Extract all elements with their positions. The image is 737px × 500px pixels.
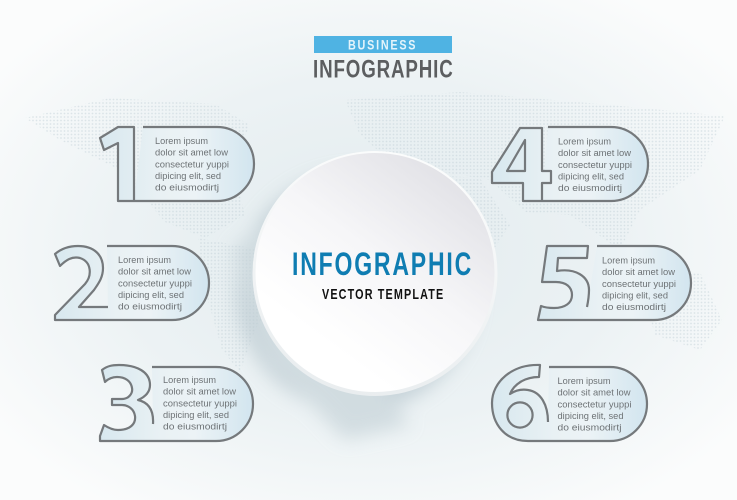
- panel 4 text: dipicing elit, sed: [558, 172, 624, 182]
- panel 6 text: dipicing elit, sed: [558, 411, 624, 422]
- title banner: [314, 36, 452, 53]
- panel 2 text: consectetur yuppi: [118, 278, 192, 289]
- title block: [313, 36, 454, 83]
- title: infographic: INFOGRAPHIC: [313, 55, 454, 83]
- panel 4 text: consectetur yuppi: [558, 160, 632, 171]
- panel 6: [492, 365, 647, 441]
- panel 6 text: [558, 376, 632, 434]
- central subheading: VECTOR TEMPLATE: [322, 285, 444, 302]
- panel 1: [100, 127, 254, 201]
- panel 3: [100, 365, 253, 441]
- panel 1 text: consectetur yuppi: [155, 159, 229, 170]
- numeral 6 inner ring: [507, 402, 533, 428]
- panel 4 text: [558, 136, 632, 194]
- panel 5: [538, 246, 691, 320]
- numeral 4 with pill outline: [492, 127, 648, 201]
- panel 5 text: Lorem ipsum: [602, 256, 655, 266]
- panel 5 text: consectetur yuppi: [602, 279, 676, 290]
- panel 4 text: Lorem ipsum: [558, 136, 611, 148]
- panel 1 text: [155, 136, 229, 194]
- circle face: [256, 153, 494, 392]
- panel 2 text: do eiusmodirtj: [118, 302, 182, 313]
- panel 3 text: consectetur yuppi: [163, 398, 237, 409]
- panel 6 text: Lorem ipsum: [558, 376, 611, 387]
- panel 2 text: [118, 255, 192, 313]
- panel 2 text: Lorem ipsum: [118, 255, 171, 266]
- panel 3 text: Lorem ipsum: [163, 375, 216, 386]
- central heading: INFOGRAPHIC: [292, 246, 473, 282]
- panel 6 text: consectetur yuppi: [558, 399, 632, 410]
- numeral 3 with pill outline: [100, 365, 253, 441]
- panel 3 text: dolor sit amet low: [163, 387, 236, 398]
- panel 3 text: [163, 375, 237, 433]
- central circle: [252, 151, 498, 396]
- circle outer rim: [252, 151, 498, 396]
- panel 5 text: dipicing elit, sed: [602, 290, 668, 302]
- numeral 6 with pill outline: [492, 365, 647, 441]
- circle drop shadow: [232, 172, 476, 440]
- numeral 2 with pill outline: [55, 246, 209, 320]
- panel 5 text: [602, 256, 676, 313]
- panel 2 text: dolor sit amet low: [118, 267, 191, 278]
- panel 3 text: dipicing elit, sed: [163, 410, 229, 421]
- world map dots: [25, 92, 725, 372]
- panel 1 text: Lorem ipsum: [155, 136, 208, 147]
- panel 1 text: do eiusmodirtj: [155, 183, 219, 194]
- panel 6 text: dolor sit amet low: [558, 388, 631, 399]
- panel 2: [55, 246, 209, 320]
- panel 4: [492, 127, 648, 201]
- panel 5 text: dolor sit amet low: [602, 267, 675, 278]
- panel 4 text: do eiusmodirtj: [558, 183, 622, 194]
- panel 6 text: do eiusmodirtj: [558, 423, 622, 434]
- numeral 4 inner triangle: [507, 140, 525, 171]
- panel 2 text: dipicing elit, sed: [118, 290, 184, 301]
- title: business: BUSINESS: [348, 37, 417, 53]
- panel 1 text: dipicing elit, sed: [155, 171, 221, 182]
- panel 3 text: do eiusmodirtj: [163, 422, 227, 433]
- numeral 1 with pill outline: [100, 127, 254, 201]
- numeral 5 with pill outline: [538, 246, 691, 320]
- panel 5 text: do eiusmodirtj: [602, 302, 666, 313]
- panel 1 text: dolor sit amet low: [155, 148, 228, 159]
- panel 4 text: dolor sit amet low: [558, 148, 631, 159]
